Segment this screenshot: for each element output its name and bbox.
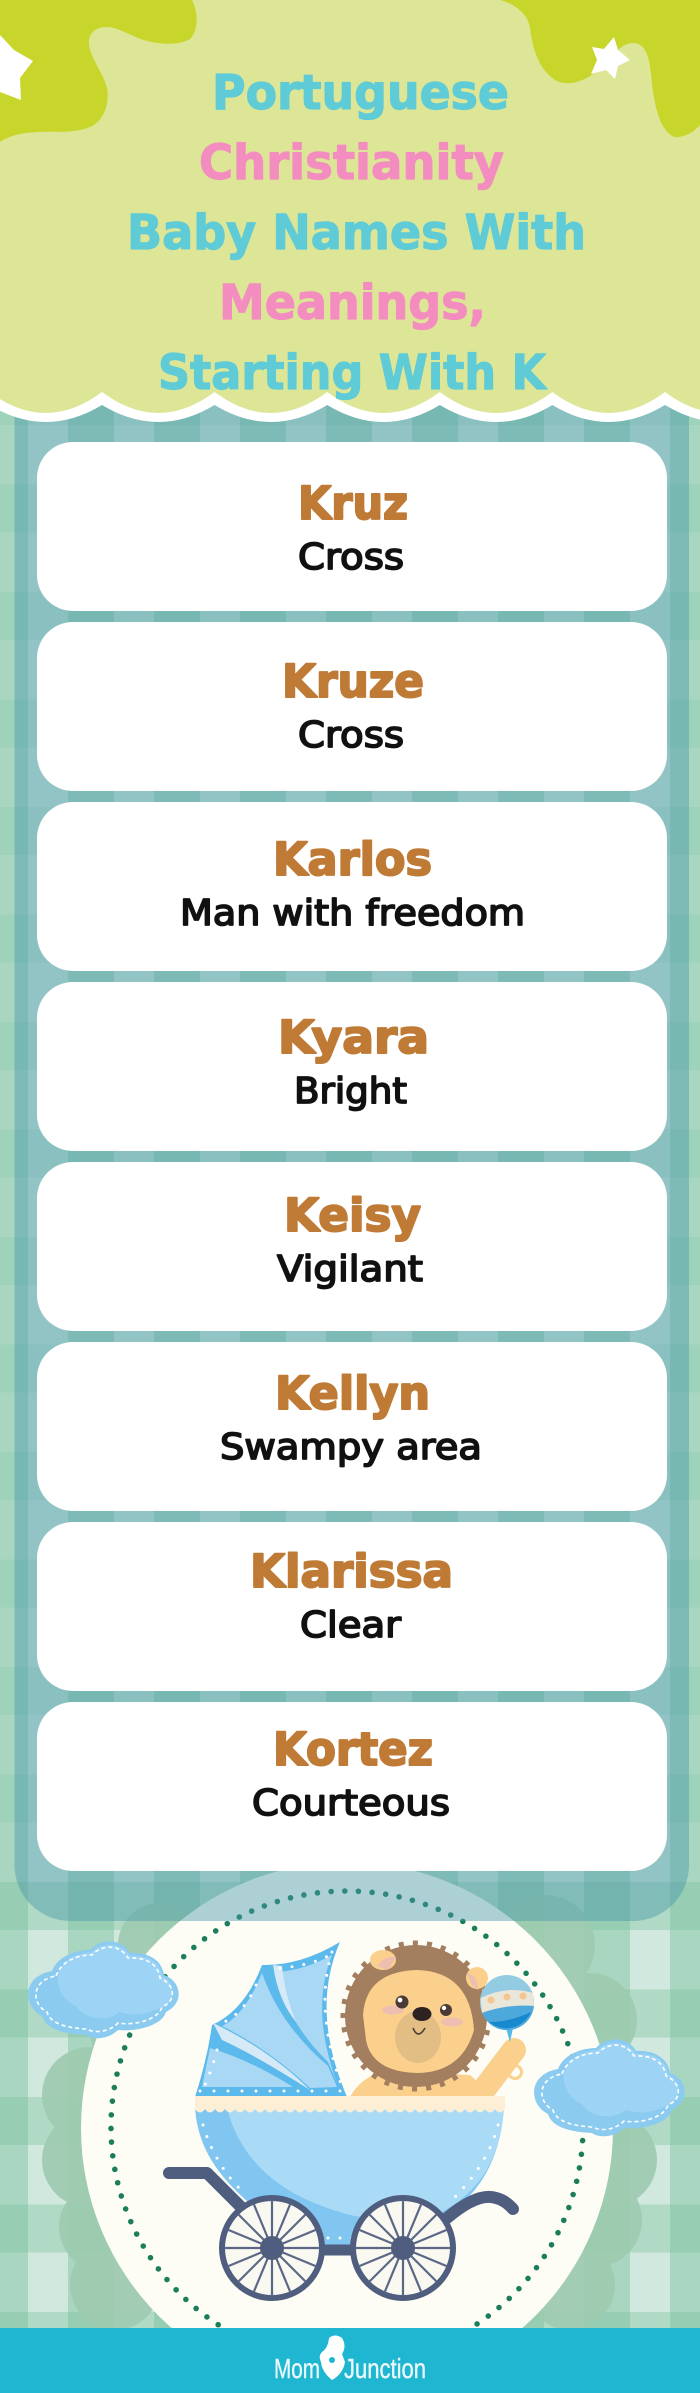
illustration: lion in pram bbox=[169, 1942, 534, 2298]
title: Christianity bbox=[199, 135, 504, 191]
logo: MomJunction: Mom bbox=[274, 2353, 320, 2384]
card: Kruze bbox=[37, 622, 667, 791]
card: Kruze: Cross bbox=[298, 715, 404, 756]
card: Kortez: Courteous bbox=[252, 1783, 450, 1824]
cloud right bbox=[534, 2039, 685, 2136]
pram handles and axle bbox=[169, 2173, 513, 2250]
star left bbox=[0, 35, 33, 100]
logo: MomJunction bbox=[274, 2336, 426, 2384]
card: Kyara: Bright bbox=[294, 1071, 407, 1112]
rattle bbox=[480, 1975, 534, 2042]
card: Kellyn: Kellyn bbox=[275, 1367, 430, 1420]
lion bbox=[344, 1944, 522, 2097]
title: Meanings, bbox=[219, 275, 486, 331]
card: Kortez bbox=[37, 1702, 667, 1871]
card: Karlos bbox=[37, 802, 667, 971]
card: Keisy: Vigilant bbox=[277, 1249, 423, 1290]
card: Karlos: Karlos bbox=[273, 833, 432, 886]
title: Portuguese bbox=[212, 65, 509, 121]
dotted ring bbox=[111, 1891, 583, 2363]
card: Klarissa bbox=[37, 1522, 667, 1691]
logo: MomJunction: Junction bbox=[344, 2353, 426, 2384]
title: Baby Names With bbox=[127, 205, 586, 261]
title bbox=[127, 65, 586, 401]
card: Klarissa: Klarissa bbox=[250, 1545, 453, 1598]
left wheel bbox=[222, 2198, 322, 2298]
title: Starting With K bbox=[158, 345, 548, 401]
card: Karlos: Man with freedom bbox=[180, 893, 525, 934]
card: Klarissa: Clear bbox=[300, 1605, 401, 1646]
card: Keisy bbox=[37, 1162, 667, 1331]
pram basket bbox=[195, 2096, 505, 2246]
cream circle bbox=[81, 1862, 613, 2393]
name cards bbox=[37, 442, 667, 1871]
card: Kortez: Kortez bbox=[273, 1723, 433, 1776]
right wheel bbox=[353, 2198, 453, 2298]
lime blob right bbox=[500, 0, 700, 137]
card: Kruz bbox=[37, 442, 667, 611]
card: Kruze: Kruze bbox=[282, 655, 424, 708]
footer bar bbox=[0, 2328, 700, 2393]
card: Kruz: Kruz bbox=[298, 477, 408, 530]
card: Keisy: Keisy bbox=[284, 1189, 421, 1242]
star right bbox=[591, 37, 630, 79]
header panel bbox=[0, 0, 700, 422]
cloud left bbox=[28, 1941, 179, 2038]
card: Kyara bbox=[37, 982, 667, 1151]
card: Kellyn: Swampy area bbox=[220, 1427, 482, 1468]
card: Kellyn bbox=[37, 1342, 667, 1511]
card: Kyara: Kyara bbox=[278, 1011, 429, 1064]
scalloped green backdrop bbox=[42, 1870, 657, 2350]
lime blob left bbox=[0, 0, 197, 142]
pram hood bbox=[195, 1942, 347, 2097]
translucent teal panel bbox=[14, 300, 689, 1921]
card: Kruz: Cross bbox=[298, 537, 404, 578]
